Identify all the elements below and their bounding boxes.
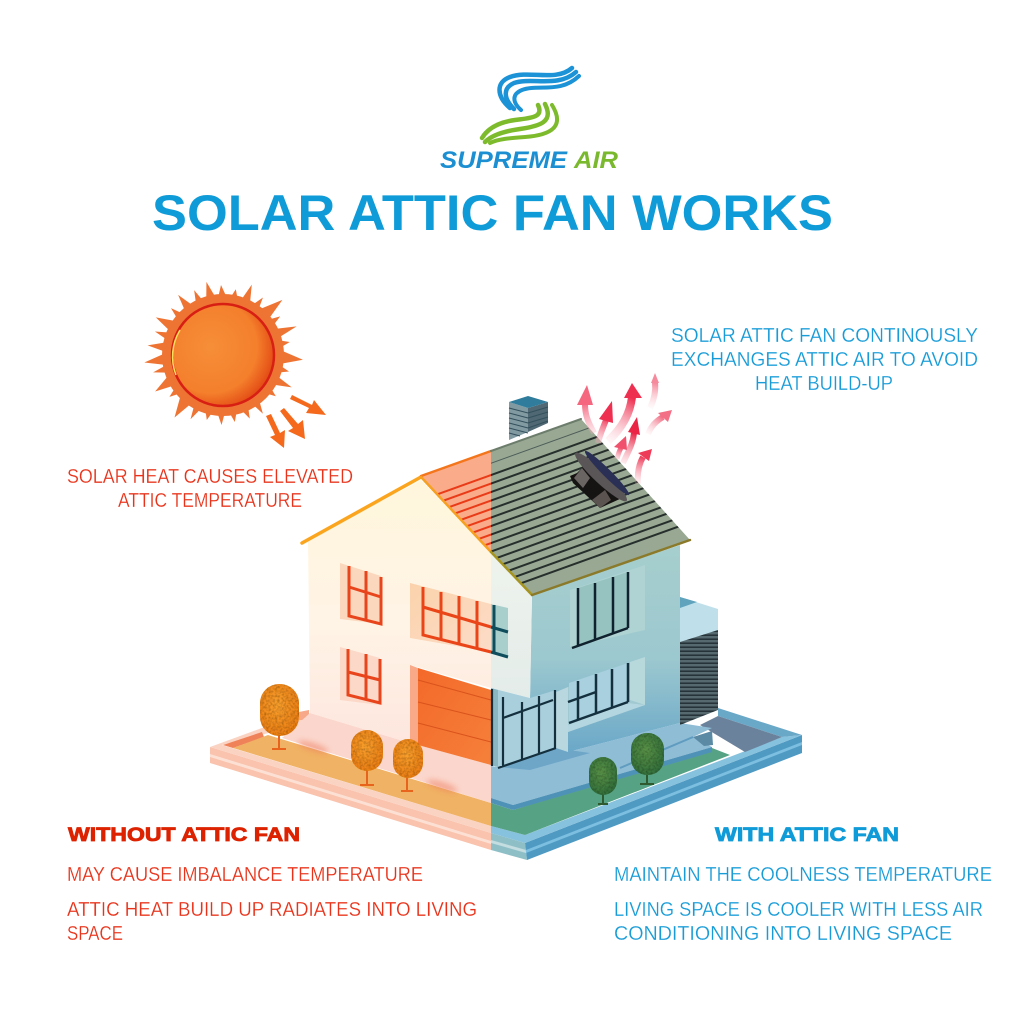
icon: sun heat arrows: [266, 395, 326, 448]
tree: green large: [631, 733, 664, 784]
caption: solar heat: SOLAR HEAT CAUSES ELEVATED: [67, 465, 353, 488]
hot air arrow 3: [608, 383, 642, 441]
caption: attic fan air exchange: HEAT BUILD-UP: [755, 372, 893, 395]
roof warm side: [422, 452, 491, 550]
left gravel bed: [233, 735, 491, 826]
platform: [210, 708, 802, 860]
extension wing: [680, 597, 718, 725]
tree: orange large: [260, 684, 299, 749]
heat arrow 2: [280, 408, 305, 439]
hot air arrow 2: [598, 401, 613, 443]
window upper centre cool: [491, 604, 508, 657]
right walkway: [491, 723, 712, 805]
hot air arrows: [577, 373, 672, 484]
right house wall: [530, 545, 680, 752]
panel: with attic fan: [614, 825, 992, 945]
window lower left: [340, 647, 380, 705]
text: without attic fan points: ATTIC HEAT BUILD UP RADIATES INTO LIVING: [67, 898, 477, 921]
tree: orange small: [393, 739, 423, 791]
hot air arrow 1: [577, 385, 594, 433]
walkway shadows: [297, 738, 458, 795]
caption: solar heat: ATTIC TEMPERATURE: [118, 489, 302, 512]
hot air arrow 8: [638, 449, 652, 484]
icon: solar attic fan: [570, 448, 632, 508]
hot air arrow 6: [614, 436, 627, 459]
title: SOLAR ATTIC FAN WORKS: [152, 185, 833, 241]
garage door: [418, 668, 491, 765]
icon: blue air swoosh: [500, 68, 579, 110]
text: without attic fan points: SPACE: [67, 922, 123, 945]
left walkway: [282, 713, 491, 803]
illustration: house on platform: [210, 373, 802, 860]
logo: Supreme Air: [440, 68, 619, 174]
tree: orange middle: [351, 730, 383, 785]
heat arrow 3: [266, 414, 285, 448]
window upper right: [570, 565, 645, 648]
tree: green small: [589, 757, 617, 804]
logo wordmark: SUPREME: [440, 147, 568, 174]
text: with attic fan points: MAINTAIN THE COOLNESS TEMPERATURE: [614, 863, 992, 886]
chimney: [509, 396, 548, 440]
left wall warm side: [308, 480, 491, 743]
lower window recess: [568, 657, 645, 732]
caption: solar heat: [67, 465, 353, 512]
logo wordmark: [440, 147, 619, 174]
hot air arrow 7: [623, 417, 640, 463]
right lawn: [491, 748, 730, 835]
roof edges: [302, 419, 690, 595]
front pillar: [556, 687, 568, 752]
window upper left: [340, 563, 381, 624]
hot air arrow 4: [650, 373, 659, 408]
text: without attic fan points: MAY CAUSE IMBALANCE TEMPERATURE: [67, 863, 423, 886]
panel: without attic fan: [67, 825, 477, 945]
caption: attic fan air exchange: EXCHANGES ATTIC AIR TO AVOID: [671, 348, 978, 371]
roof cool side: [491, 420, 689, 594]
heading: without attic fan: WITHOUT ATTIC FAN: [68, 825, 300, 846]
hot air arrow 5: [648, 410, 672, 434]
icon: green air swoosh: [482, 104, 557, 143]
roof: [422, 420, 689, 594]
sun disc: [172, 304, 274, 406]
brick wall: [680, 630, 718, 725]
caption: attic fan air exchange: [671, 324, 978, 395]
caption: attic fan air exchange: SOLAR ATTIC FAN CONTINOUSLY: [671, 324, 978, 347]
window upper centre warm: [410, 583, 491, 652]
text: with attic fan points: LIVING SPACE IS COOLER WITH LESS AIR: [614, 898, 983, 921]
glass corner storefront: [491, 688, 556, 768]
garage jamb: [410, 665, 418, 745]
heat arrow 1: [290, 395, 326, 415]
text: with attic fan points: CONDITIONING INTO LIVING SPACE: [614, 922, 952, 945]
icon: sun: [144, 281, 303, 425]
text: without attic fan points: [67, 863, 477, 945]
logo wordmark: AIR: [573, 147, 619, 174]
heading: with attic fan: WITH ATTIC FAN: [715, 825, 899, 846]
window lower right: [568, 663, 628, 723]
text: with attic fan points: [614, 863, 992, 945]
sun rays: [144, 281, 303, 425]
left wall cool side: [491, 553, 532, 698]
